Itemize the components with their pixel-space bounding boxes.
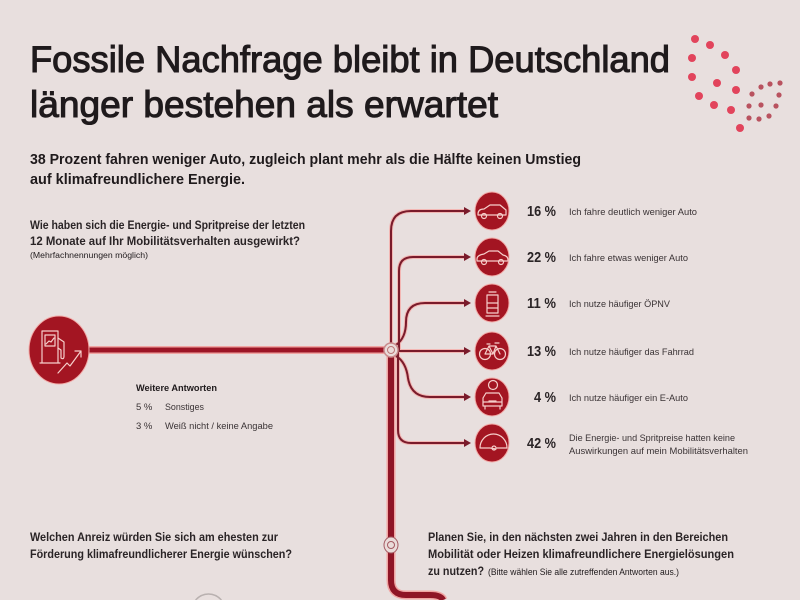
- other answers: Weiß nicht / keine Angabe: [165, 421, 273, 432]
- question: plans: Planen Sie, in den nächsten zwei Jahren in den Bereichen: [428, 530, 728, 544]
- other answers: 5 %: [136, 402, 153, 413]
- answer: 16 percent: [475, 192, 697, 230]
- answer: 42 percent: 42 %: [527, 435, 556, 452]
- title: länger bestehen als erwartet: [30, 83, 499, 125]
- decorative dot logo: [688, 35, 783, 132]
- answer: 22 percent: [475, 238, 688, 276]
- main trunk line: [85, 350, 443, 600]
- other answers: 3 %: [136, 421, 153, 432]
- answer: 22 percent: 22 %: [527, 249, 556, 266]
- question: plans: zu nutzen?: [428, 564, 484, 578]
- answer: 11 percent: [475, 284, 671, 322]
- title: [30, 38, 670, 125]
- connector lines: [391, 207, 471, 447]
- answer: 42 percent: Auswirkungen auf mein Mobilitätsverhalten: [569, 446, 748, 457]
- question: plans: Mobilität oder Heizen klimafreundlichere Energielösungen: [428, 547, 734, 561]
- answer: 4 percent: Ich nutze häufiger ein E-Auto: [569, 393, 688, 404]
- answer: 4 percent: 4 %: [534, 389, 556, 406]
- other answers: [136, 383, 273, 432]
- answer: 16 percent: Ich fahre deutlich weniger Auto: [569, 207, 697, 218]
- answer: 4 percent: [475, 378, 688, 416]
- icon: fuel pump with rising arrow: [29, 316, 89, 384]
- answer: 42 percent: [475, 424, 748, 462]
- answer: 22 percent: Ich fahre etwas weniger Auto: [569, 253, 688, 264]
- question: price impact: (Mehrfachnennungen möglich): [30, 251, 148, 260]
- other answers: Weitere Antworten: [136, 383, 217, 394]
- question: incentive: Förderung klimafreundlicherer Energie wünschen?: [30, 547, 292, 561]
- answer: 13 percent: Ich nutze häufiger das Fahrrad: [569, 347, 694, 358]
- lower node: [384, 537, 398, 553]
- question: plans: (Bitte wählen Sie alle zutreffenden Antworten aus.): [488, 567, 679, 577]
- subtitle: auf klimafreundlichere Energie.: [30, 171, 245, 188]
- question: plans: [428, 530, 734, 578]
- question: price impact: [30, 218, 305, 260]
- question: price impact: Wie haben sich die Energie- und Spritpreise der letzten: [30, 218, 305, 232]
- question: incentive: [30, 530, 292, 561]
- answer: 13 percent: 13 %: [527, 343, 556, 360]
- subtitle: 38 Prozent fahren weniger Auto, zugleich plant mehr als die Hälfte keinen Umstieg: [30, 151, 581, 168]
- subtitle: [30, 151, 581, 188]
- answer: 42 percent: Die Energie- und Spritpreise hatten keine: [569, 433, 735, 444]
- title: Fossile Nachfrage bleibt in Deutschland: [30, 38, 670, 80]
- question: incentive: Welchen Anreiz würden Sie sich am ehesten zur: [30, 530, 278, 544]
- answer: 16 percent: 16 %: [527, 203, 556, 220]
- answer: 11 percent: Ich nutze häufiger ÖPNV: [569, 299, 671, 310]
- answer: 13 percent: [475, 332, 694, 370]
- partial circle at bottom edge: [196, 594, 221, 600]
- question: price impact: 12 Monate auf Ihr Mobilitätsverhalten ausgewirkt?: [30, 234, 300, 248]
- answer: 11 percent: 11 %: [527, 295, 556, 312]
- other answers: Sonstiges: [165, 402, 204, 413]
- hub node: [384, 343, 398, 357]
